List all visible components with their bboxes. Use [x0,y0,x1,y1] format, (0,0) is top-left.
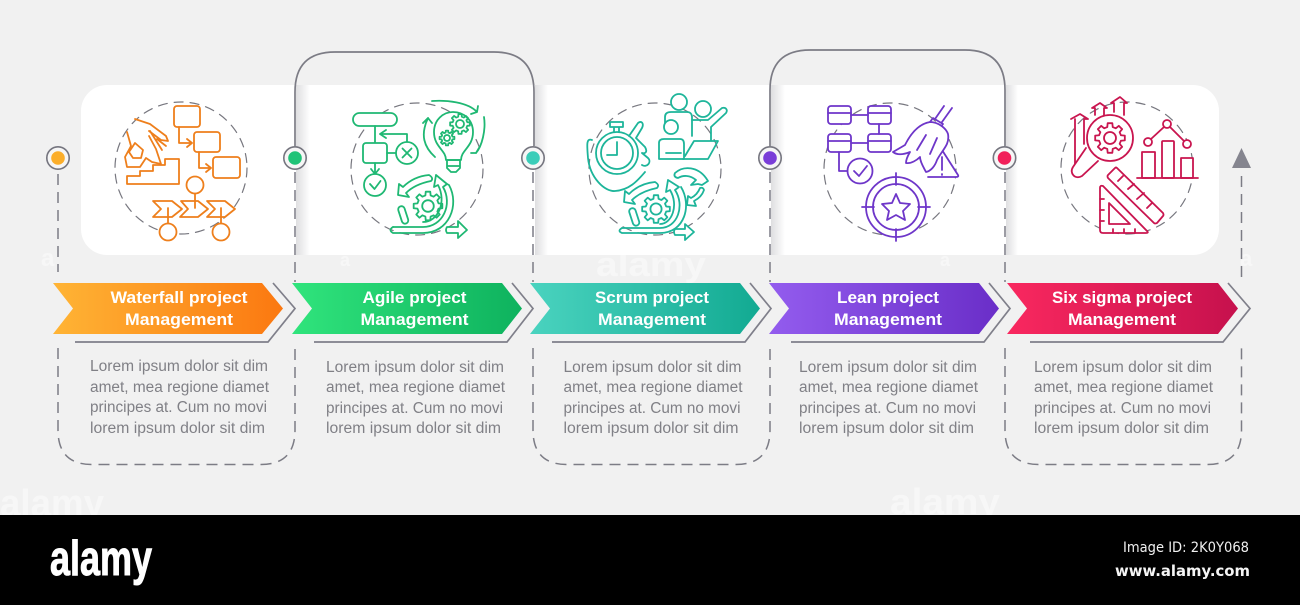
step 1 banner: Waterfall project [110,289,248,307]
step 5 text: lorem ipsum dolor sit dim [1034,420,1209,437]
faint watermarks: alamy [596,246,706,284]
timeline dot 3 [522,147,544,169]
faint watermarks: a [1240,246,1253,271]
step 5 banner [1007,283,1250,342]
faint watermarks [0,245,1253,525]
step 1 text: principes at. Cum no movi [90,399,267,416]
step 1 text: amet, mea regione diamet [90,379,270,396]
step 5 banner: Management [1068,311,1177,329]
step 4 text: amet, mea regione diamet [799,379,979,396]
step 3 text: lorem ipsum dolor sit dim [564,420,738,437]
dashed connector: step 3 to 4 [533,172,770,464]
dashed connector: step 5 to end [1005,172,1242,464]
step 5 text: amet, mea regione diamet [1034,379,1214,396]
step 3 text: principes at. Cum no movi [564,400,740,417]
footer bar [0,515,1300,605]
faint watermarks: alamy [890,481,1000,522]
step 3 text: Lorem ipsum dolor sit dim [564,359,742,376]
site url: www.alamy.com [1115,562,1250,580]
step 3 text: amet, mea regione diamet [564,379,743,396]
footer logo: alamy [50,532,152,586]
step 4 text: lorem ipsum dolor sit dim [799,420,974,437]
icon: scrum [587,94,727,240]
step 1 banner: Management [125,311,234,329]
icon: agile [351,101,485,238]
dashed connector: step 1 to 2 [58,172,295,464]
step 1 text: lorem ipsum dolor sit dim [90,420,265,437]
step 1 text [90,358,270,437]
faint watermarks: alamy [0,483,104,525]
step 4 text: principes at. Cum no movi [799,400,976,417]
timeline dot 4 [759,147,781,169]
white icon panel [81,85,1219,255]
step 1 banner [53,283,295,342]
timeline dot 5 [993,147,1016,169]
icon: lean [824,103,958,241]
step 5 text: principes at. Cum no movi [1034,400,1211,417]
image id: Image ID: 2K0Y068 [1123,540,1249,556]
step 2 text [326,359,506,437]
timeline dot 2 [284,147,306,169]
step 2 banner: Management [360,311,469,329]
faint watermarks: a [940,250,951,270]
step 5 text: Lorem ipsum dolor sit dim [1034,359,1212,376]
step 4 text [799,359,979,437]
step 1 text: Lorem ipsum dolor sit dim [90,358,268,375]
step 4 banner [769,283,1010,342]
faint watermarks: a [41,245,55,272]
step 2 text: Lorem ipsum dolor sit dim [326,359,504,376]
step 3 text [564,359,743,437]
step 3 banner: Scrum project [595,289,710,307]
step 5 text [1034,359,1214,437]
icon: six sigma [1061,97,1198,234]
step 5 banner: Six sigma project [1052,289,1193,307]
icon: waterfall [115,102,247,240]
step 2 banner [292,283,533,342]
timeline dot 1 [47,147,69,169]
step 3 banner [530,283,771,342]
step 2 text: principes at. Cum no movi [326,400,503,417]
step 4 banner: Management [834,311,943,329]
step 2 text: lorem ipsum dolor sit dim [326,420,501,437]
step 2 text: amet, mea regione diamet [326,379,506,396]
top arch connector 2 [770,50,1005,146]
faint watermarks: a [340,250,351,270]
end arrowhead [1232,148,1251,168]
step 2 banner: Agile project [362,289,467,307]
step 4 text: Lorem ipsum dolor sit dim [799,359,977,376]
step 4 banner: Lean project [837,289,940,307]
top arch connector 1 [295,52,534,146]
step 3 banner: Management [598,311,707,329]
